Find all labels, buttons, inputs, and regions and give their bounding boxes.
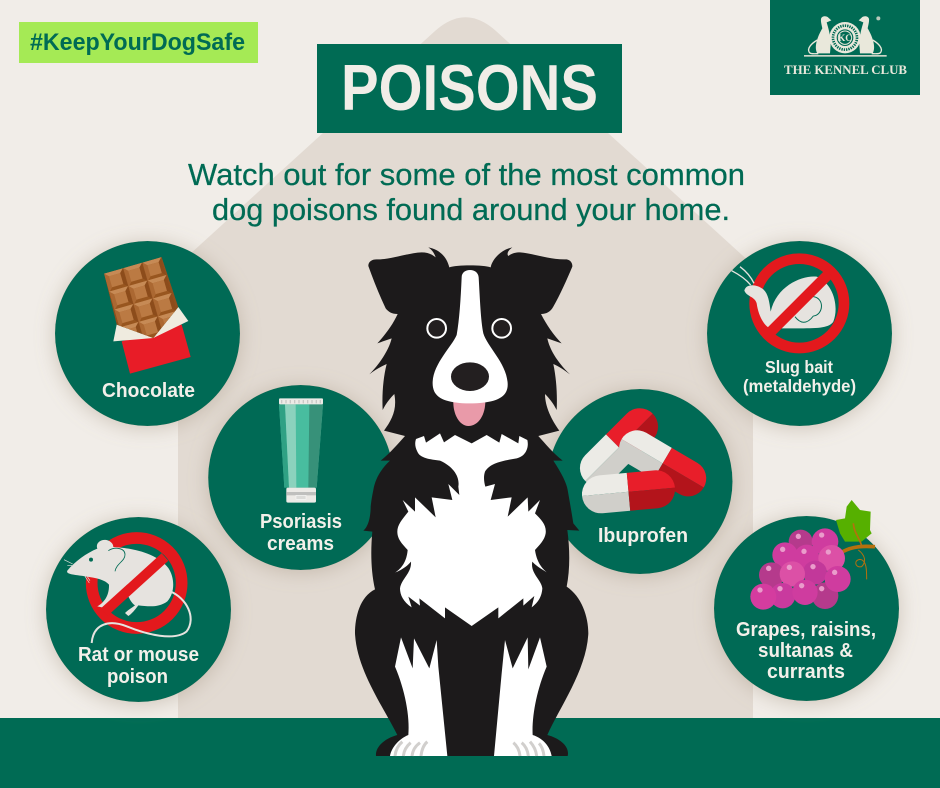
left eye [427, 319, 446, 338]
icon: prohibited rat [64, 538, 191, 643]
subtitle: Watch out for some of the most common [188, 157, 745, 192]
panel: chocolate [55, 241, 240, 426]
panel: grapes [714, 500, 899, 701]
panel: slug bait [707, 241, 892, 426]
label: slug bait [743, 357, 856, 396]
icon: prohibited snail [732, 259, 844, 348]
icon: chocolate bar [104, 257, 191, 374]
hashtag badge: #KeepYourDogSafe [30, 29, 245, 56]
label: grapes: sultanas & [758, 640, 853, 662]
house shape [178, 17, 753, 718]
label: chocolate: Chocolate [102, 380, 195, 402]
right eye [492, 319, 511, 338]
illustration: border collie dog [355, 247, 588, 756]
icon: cream tube [279, 398, 323, 503]
title: POISONS [341, 51, 598, 124]
logo roundel: KC [838, 34, 852, 44]
logo: The Kennel Club: THE KENNEL CLUB [784, 63, 907, 77]
chest fur [395, 433, 547, 626]
paw toes [395, 742, 544, 756]
label: grapes: currants [767, 661, 845, 683]
label: psoriasis creams: Psoriasis [260, 511, 342, 533]
label: ibuprofen: Ibuprofen [598, 525, 688, 547]
label: grapes: Grapes, raisins, [736, 619, 876, 641]
icon: grapes [750, 500, 875, 610]
dog silhouette [355, 247, 588, 756]
label: psoriasis creams: creams [267, 533, 334, 555]
label: rat or mouse poison [78, 644, 199, 688]
nose [451, 362, 489, 391]
label: slug bait: (metaldehyde) [743, 376, 856, 396]
left front leg [390, 637, 447, 756]
panel: rat or mouse poison [46, 517, 231, 702]
label: psoriasis creams [260, 511, 342, 555]
face blaze [433, 270, 508, 403]
subtitle [188, 157, 745, 227]
right front leg [494, 637, 552, 756]
ground band [0, 718, 940, 788]
label: grapes [736, 619, 876, 683]
logo: The Kennel Club [770, 0, 920, 95]
icon: capsules [572, 401, 713, 515]
hashtag badge [19, 22, 258, 63]
panel: ibuprofen [548, 389, 732, 574]
label: rat or mouse poison: Rat or mouse [78, 644, 199, 666]
label: slug bait: Slug bait [765, 357, 833, 377]
panel: psoriasis creams [208, 385, 393, 570]
logo dogs [804, 16, 887, 57]
subtitle: dog poisons found around your home. [212, 192, 730, 227]
label: rat or mouse poison: poison [107, 666, 168, 688]
tongue [453, 400, 485, 426]
